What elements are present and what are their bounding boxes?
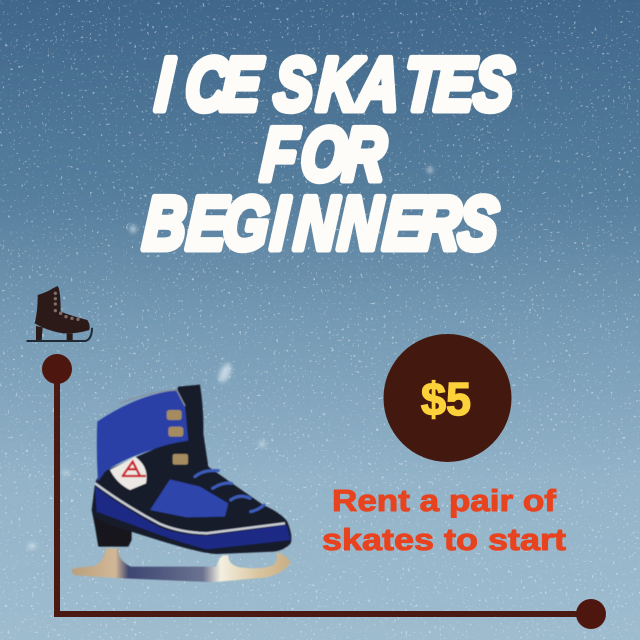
- price circle: [384, 334, 512, 462]
- background: soft snowflakes: [28, 167, 433, 549]
- blue upper: [97, 390, 188, 482]
- boot dark body: [92, 385, 291, 554]
- logo patch: [110, 457, 147, 490]
- heel: [92, 510, 132, 547]
- eyelets and laces: [167, 410, 188, 465]
- title: FOR: [259, 113, 389, 197]
- icon: small dark skate: [27, 286, 92, 341]
- price value: $5: [421, 373, 471, 425]
- upper collar trim: [120, 390, 185, 406]
- caption: rent a pair of skates to start: [322, 483, 566, 557]
- blade: [72, 548, 291, 582]
- blue side panel: [150, 479, 228, 517]
- blue sole stripe: [95, 487, 291, 549]
- caption: rent a pair of skates to start: Rent a pair of: [332, 483, 557, 518]
- title: ICESKATES: [153, 43, 516, 127]
- photo: blue ice skate: [72, 385, 291, 582]
- title: BEGINNERS: [141, 182, 501, 266]
- caption: rent a pair of skates to start: skates to start: [322, 522, 566, 557]
- white piping: [95, 483, 285, 533]
- axis: vertical and horizontal line with end dots: [42, 354, 606, 629]
- title: [141, 43, 516, 266]
